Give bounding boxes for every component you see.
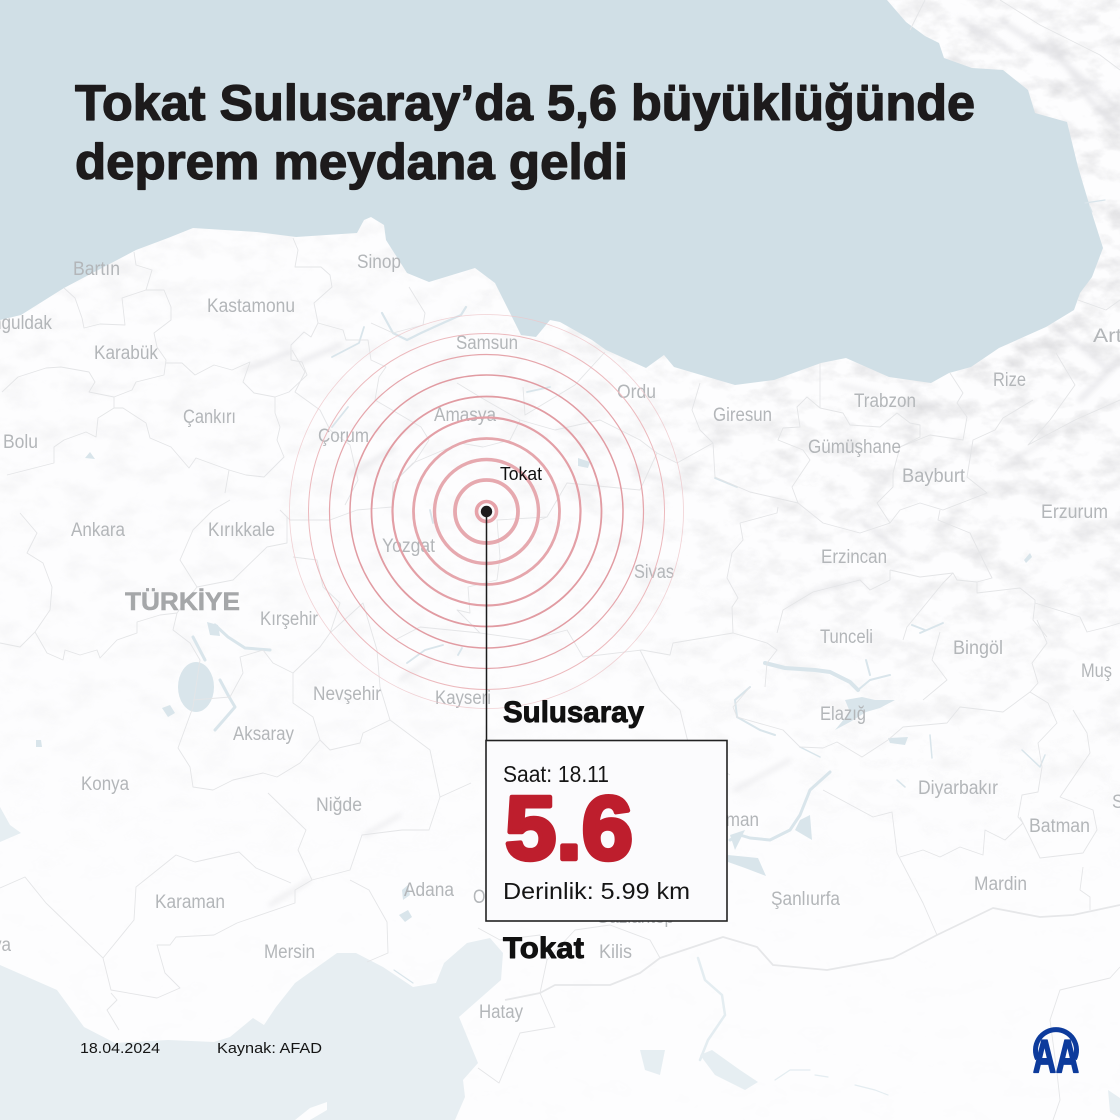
- label: Ordu: Ordu: [617, 382, 656, 403]
- country label: TÜRKİYE: TÜRKİYE: [125, 587, 240, 616]
- seismic rings: [290, 314, 684, 708]
- label: Kilis: Kilis: [599, 942, 632, 963]
- province name: Tokat: Tokat: [503, 932, 584, 965]
- magnitude: 5.6: [505, 779, 633, 879]
- heading: Sulusaray: Sulusaray: [503, 696, 644, 729]
- epicentre dot: [481, 506, 492, 517]
- label: Tunceli: Tunceli: [820, 627, 873, 648]
- title line 2: deprem meydana geldi: [75, 134, 628, 190]
- icon: AA logo: [1033, 1030, 1079, 1082]
- label: Gümüşhane: Gümüşhane: [808, 437, 901, 458]
- label: Ankara: Ankara: [71, 520, 125, 541]
- icon: AA logo: AA: [1033, 1030, 1079, 1082]
- label: Hatay: Hatay: [479, 1002, 523, 1023]
- label: Mersin: Mersin: [264, 942, 315, 963]
- label: Giresun: Giresun: [713, 405, 772, 426]
- Black Sea: [0, 0, 1103, 385]
- label: Adıyaman: Adıyaman: [682, 810, 759, 831]
- label: Aksaray: Aksaray: [233, 724, 294, 745]
- national border: Syria: [505, 905, 1120, 1000]
- label: Kayseri: Kayseri: [435, 688, 491, 709]
- label: Erzurum: Erzurum: [1041, 502, 1108, 523]
- label: Bartın: Bartın: [73, 259, 120, 280]
- label: Çorum: Çorum: [318, 426, 369, 447]
- label: Adana: Adana: [404, 880, 454, 901]
- label: Kırşehir: Kırşehir: [260, 609, 319, 630]
- label: Yozgat: Yozgat: [382, 536, 436, 557]
- label: Sivas: Sivas: [634, 562, 674, 583]
- callout box: [486, 740, 727, 921]
- label: Nevşehir: Nevşehir: [313, 684, 382, 705]
- label: Elazığ: Elazığ: [820, 704, 866, 725]
- land terrain shading: [94, 0, 1120, 904]
- title: [75, 75, 975, 190]
- label: Konya: Konya: [81, 774, 129, 795]
- label: Karabük: Karabük: [94, 343, 158, 364]
- label: Kırıkkale: Kırıkkale: [208, 520, 275, 541]
- label: Sinop: Sinop: [357, 252, 401, 273]
- province name labels: [0, 252, 1120, 1023]
- label: Mardin: Mardin: [974, 874, 1027, 895]
- label: Trabzon: Trabzon: [854, 391, 916, 412]
- time: Saat: 18.11: [503, 761, 609, 787]
- label: Karaman: Karaman: [155, 892, 225, 913]
- label: Batman: Batman: [1029, 816, 1090, 837]
- title line 1: Tokat Sulusaray’da 5,6 büyüklüğünde: [75, 75, 975, 131]
- Cyprus: [295, 1102, 327, 1120]
- label: Gaziantep: Gaziantep: [596, 907, 674, 928]
- footer source: Kaynak: AFAD: [217, 1041, 322, 1057]
- label: Kastamonu: Kastamonu: [207, 296, 295, 317]
- label: Amasya: Amasya: [434, 405, 496, 426]
- label: Bayburt: Bayburt: [902, 466, 966, 487]
- label: Bolu: Bolu: [3, 432, 38, 453]
- label: Osmaniye: Osmaniye: [473, 887, 545, 908]
- label: Rize: Rize: [993, 370, 1026, 391]
- Mediterranean Sea: [0, 938, 503, 1120]
- leader line: [486, 511, 488, 741]
- label: Erzincan: Erzincan: [821, 547, 887, 568]
- label: Muş: Muş: [1081, 661, 1112, 682]
- epicentre label: Tokat: Tokat: [500, 463, 542, 484]
- footer date: 18.04.2024: [80, 1041, 160, 1057]
- label: Çankırı: Çankırı: [183, 407, 236, 428]
- label: Bingöl: Bingöl: [953, 638, 1003, 659]
- label: Samsun: Samsun: [456, 333, 518, 354]
- label: Diyarbakır: Diyarbakır: [918, 778, 999, 799]
- label: Şanlıurfa: Şanlıurfa: [771, 889, 840, 910]
- label: Niğde: Niğde: [316, 795, 362, 816]
- depth: Derinlik: 5.99 km: [503, 878, 690, 904]
